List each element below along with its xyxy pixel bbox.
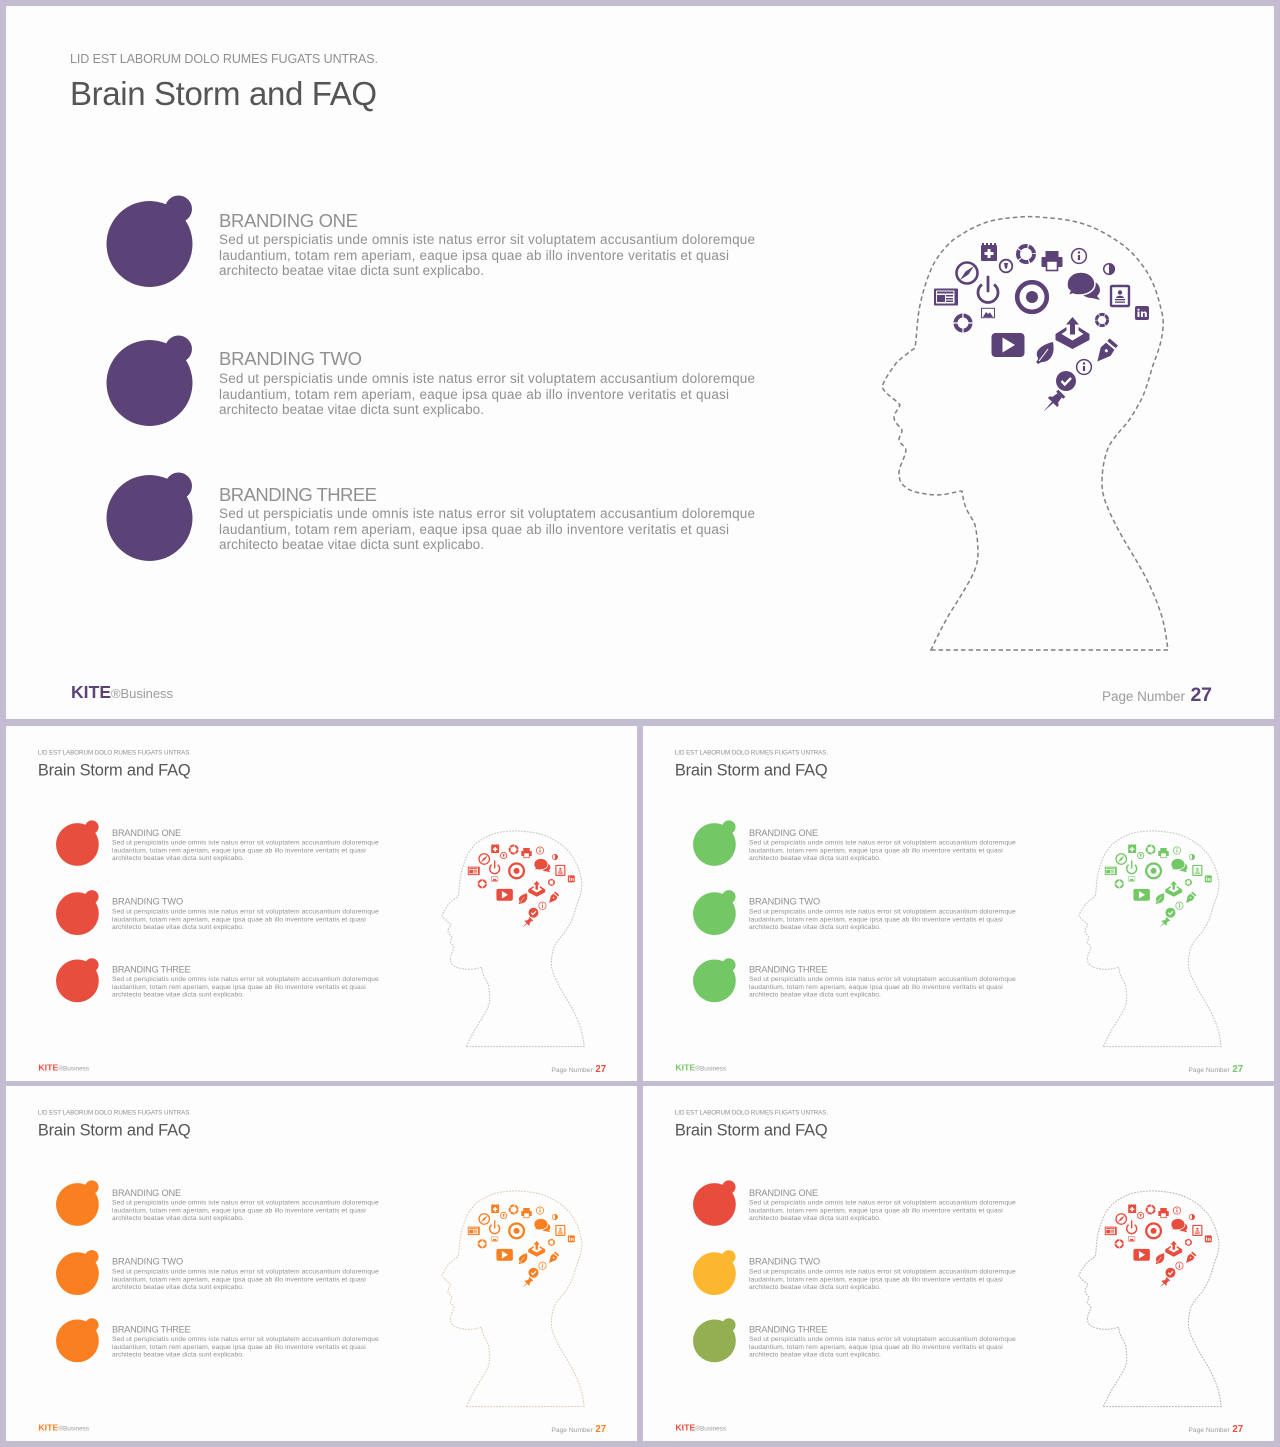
body text: Sed ut perspiciatis unde omnis iste natus error sit voluptatem accusantium doloremque: [219, 371, 755, 386]
heading: BRANDING THREE: [749, 1324, 828, 1334]
badge circle: [693, 1250, 736, 1295]
icon: info: [1072, 249, 1086, 263]
body text: laudantium, totam rem aperiam, eaque ipsa quae ab illo inventore veritatis et quasi: [112, 847, 366, 854]
page number: 27: [1232, 1424, 1243, 1435]
body text: [112, 1200, 379, 1222]
body text: architecto beatae vitae dicta sunt explicabo.: [112, 924, 244, 931]
page number: [551, 1424, 606, 1435]
body text: architecto beatae vitae dicta sunt explicabo.: [749, 924, 881, 931]
head outline: [442, 1191, 584, 1407]
heading: BRANDING THREE: [219, 484, 377, 505]
page number: 27: [1232, 1064, 1243, 1075]
body text: [749, 1269, 1016, 1291]
body text: [749, 909, 1016, 931]
list item: branding one: [693, 1180, 1016, 1226]
title: Brain Storm and FAQ: [70, 75, 377, 112]
icon: push pin: [1039, 389, 1066, 416]
heading: BRANDING TWO: [112, 897, 183, 907]
head outline: [882, 217, 1168, 650]
list item: branding three: [106, 472, 755, 561]
body text: laudantium, totam rem aperiam, eaque ipsa quae ab illo inventore veritatis et quasi: [749, 984, 1003, 991]
heading: BRANDING ONE: [749, 1188, 818, 1198]
icon: leaf: [1036, 342, 1054, 364]
panel: orange slide: [6, 1086, 637, 1441]
body text: Sed ut perspiciatis unde omnis iste natus error sit voluptatem accusantium doloremque: [749, 1200, 1016, 1207]
icon: medical calendar: [981, 243, 997, 261]
footer logo: ®Business: [58, 1424, 89, 1432]
body text: architecto beatae vitae dicta sunt explicabo.: [112, 991, 244, 998]
body text: Sed ut perspiciatis unde omnis iste natus error sit voluptatem accusantium doloremque: [112, 909, 379, 916]
kicker: LID EST LABORUM DOLO RUMES FUGATS UNTRAS.: [675, 1109, 828, 1116]
footer logo: KITE: [71, 682, 111, 702]
body text: Sed ut perspiciatis unde omnis iste natus error sit voluptatem accusantium doloremque: [112, 1269, 379, 1276]
page number: 27: [595, 1424, 606, 1435]
badge circle: [56, 1318, 99, 1362]
heading: BRANDING TWO: [219, 348, 362, 369]
body text: [112, 840, 379, 862]
body text: architecto beatae vitae dicta sunt explicabo.: [749, 1284, 881, 1291]
badge circle: [106, 196, 192, 287]
heading: BRANDING THREE: [112, 964, 191, 974]
footer logo: ®Business: [695, 1424, 726, 1432]
head outline: [1079, 1191, 1221, 1407]
icon: power: [978, 277, 998, 302]
page number: Page Number: [551, 1067, 593, 1074]
body text: [749, 976, 1016, 998]
heading: BRANDING ONE: [112, 1188, 181, 1198]
badge circle: [56, 890, 99, 935]
footer logo: ®Business: [58, 1064, 89, 1072]
body text: architecto beatae vitae dicta sunt explicabo.: [749, 1351, 881, 1358]
badge circle: [106, 472, 192, 561]
body text: architecto beatae vitae dicta sunt explicabo.: [219, 537, 484, 552]
list item: branding two: [693, 890, 1016, 935]
footer logo: ®Business: [695, 1064, 726, 1072]
badge circle: [693, 890, 736, 935]
body text: [112, 1269, 379, 1291]
icon cluster: brain icons: [1105, 1204, 1212, 1290]
body text: [749, 840, 1016, 862]
body text: Sed ut perspiciatis unde omnis iste natus error sit voluptatem accusantium doloremque: [749, 1336, 1016, 1343]
footer logo: [38, 1062, 89, 1072]
icon: fountain pen: [1092, 338, 1119, 366]
icon: half circle: [1104, 263, 1115, 275]
body text: [219, 232, 755, 278]
page number: Page Number: [1188, 1067, 1230, 1074]
body text: laudantium, totam rem aperiam, eaque ipsa quae ab illo inventore veritatis et quasi: [112, 917, 366, 924]
list item: branding one: [693, 820, 1016, 866]
heading: BRANDING TWO: [749, 1257, 820, 1267]
body text: architecto beatae vitae dicta sunt explicabo.: [749, 991, 881, 998]
body text: laudantium, totam rem aperiam, eaque ipsa quae ab illo inventore veritatis et quasi: [112, 1344, 366, 1351]
list item: branding three: [56, 958, 379, 1002]
body text: [112, 1336, 379, 1358]
body text: laudantium, totam rem aperiam, eaque ipsa quae ab illo inventore veritatis et quasi: [749, 1207, 1003, 1214]
list item: branding two: [56, 1250, 379, 1295]
kicker: LID EST LABORUM DOLO RUMES FUGATS UNTRAS.: [675, 749, 828, 756]
heading: BRANDING THREE: [749, 964, 828, 974]
icon: compass: [956, 262, 978, 284]
heading: BRANDING ONE: [219, 210, 358, 231]
badge circle: [56, 1180, 99, 1226]
title: Brain Storm and FAQ: [675, 1121, 828, 1139]
icon cluster: brain icons: [1105, 844, 1212, 930]
icon: bulb: [1000, 260, 1012, 272]
badge circle: [56, 820, 99, 866]
icon: info small: [1077, 360, 1091, 374]
heading: BRANDING ONE: [112, 828, 181, 838]
body text: Sed ut perspiciatis unde omnis iste natus error sit voluptatem accusantium doloremque: [219, 232, 755, 247]
page number: [1188, 1424, 1243, 1435]
body text: Sed ut perspiciatis unde omnis iste natus error sit voluptatem accusantium doloremque: [112, 1200, 379, 1207]
body text: laudantium, totam rem aperiam, eaque ipsa quae ab illo inventore veritatis et quasi: [112, 984, 366, 991]
body text: laudantium, totam rem aperiam, eaque ipsa quae ab illo inventore veritatis et quasi: [749, 917, 1003, 924]
badge circle: [693, 1318, 736, 1362]
icon: check badge: [1056, 371, 1076, 391]
icon cluster: brain icons: [468, 844, 575, 930]
body text: [219, 506, 755, 552]
list item: branding three: [693, 1318, 1016, 1362]
icon: target: [1017, 282, 1047, 312]
kicker: LID EST LABORUM DOLO RUMES FUGATS UNTRAS.: [70, 52, 378, 66]
list item: branding two: [106, 336, 755, 426]
footer logo: [71, 682, 174, 702]
page number: Page Number: [1102, 689, 1186, 704]
footer logo: KITE: [38, 1422, 58, 1432]
badge circle: [56, 958, 99, 1002]
body text: laudantium, totam rem aperiam, eaque ipsa quae ab illo inventore veritatis et quasi: [219, 387, 729, 402]
icon: aperture: [1018, 246, 1034, 262]
footer logo: KITE: [675, 1422, 695, 1432]
body text: laudantium, totam rem aperiam, eaque ipsa quae ab illo inventore veritatis et quasi: [112, 1277, 366, 1284]
body text: Sed ut perspiciatis unde omnis iste natus error sit voluptatem accusantium doloremque: [112, 976, 379, 983]
list item: branding one: [106, 196, 755, 287]
heading: BRANDING ONE: [749, 828, 818, 838]
body text: architecto beatae vitae dicta sunt explicabo.: [112, 1284, 244, 1291]
body text: Sed ut perspiciatis unde omnis iste natus error sit voluptatem accusantium doloremque: [112, 1336, 379, 1343]
page number: 27: [1190, 684, 1212, 706]
icon: aperture ring: [1096, 314, 1108, 326]
list item: branding two: [693, 1250, 1016, 1295]
heading: BRANDING TWO: [749, 897, 820, 907]
list item: branding three: [693, 958, 1016, 1002]
list item: branding one: [56, 820, 379, 866]
heading: BRANDING TWO: [112, 1257, 183, 1267]
body text: architecto beatae vitae dicta sunt explicabo.: [112, 855, 244, 862]
badge circle: [693, 958, 736, 1002]
body text: laudantium, totam rem aperiam, eaque ipsa quae ab illo inventore veritatis et quasi: [749, 1277, 1003, 1284]
footer logo: KITE: [38, 1062, 58, 1072]
body text: laudantium, totam rem aperiam, eaque ipsa quae ab illo inventore veritatis et quasi: [219, 248, 729, 263]
footer logo: [675, 1422, 726, 1432]
body text: architecto beatae vitae dicta sunt explicabo.: [749, 1215, 881, 1222]
badge circle: [106, 336, 192, 426]
icon: printer: [1042, 251, 1062, 270]
heading: BRANDING THREE: [112, 1324, 191, 1334]
body text: Sed ut perspiciatis unde omnis iste natus error sit voluptatem accusantium doloremque: [749, 1269, 1016, 1276]
icon cluster: brain icons: [468, 1204, 575, 1290]
panel: green slide: [643, 726, 1274, 1081]
title: Brain Storm and FAQ: [675, 761, 828, 779]
kicker: LID EST LABORUM DOLO RUMES FUGATS UNTRAS.: [38, 749, 191, 756]
title: Brain Storm and FAQ: [38, 1121, 191, 1139]
body text: laudantium, totam rem aperiam, eaque ipsa quae ab illo inventore veritatis et quasi: [749, 1344, 1003, 1351]
body text: [219, 371, 755, 417]
head outline: [1079, 831, 1221, 1047]
body text: architecto beatae vitae dicta sunt explicabo.: [112, 1215, 244, 1222]
icon: newspaper: [934, 288, 958, 306]
title: Brain Storm and FAQ: [38, 761, 191, 779]
page number: Page Number: [551, 1427, 593, 1434]
footer logo: ®Business: [111, 686, 174, 701]
page number: [1188, 1064, 1243, 1075]
kicker: LID EST LABORUM DOLO RUMES FUGATS UNTRAS.: [38, 1109, 191, 1116]
page number: 27: [595, 1064, 606, 1075]
body text: [749, 1200, 1016, 1222]
body text: Sed ut perspiciatis unde omnis iste natus error sit voluptatem accusantium doloremque: [112, 840, 379, 847]
footer logo: [38, 1422, 89, 1432]
body text: Sed ut perspiciatis unde omnis iste natus error sit voluptatem accusantium doloremque: [749, 909, 1016, 916]
badge circle: [56, 1250, 99, 1295]
body text: architecto beatae vitae dicta sunt explicabo.: [112, 1351, 244, 1358]
badge circle: [693, 820, 736, 866]
list item: branding one: [56, 1180, 379, 1226]
panel: main purple slide: [6, 6, 1274, 719]
page number: [1102, 684, 1212, 706]
body text: architecto beatae vitae dicta sunt explicabo.: [219, 402, 484, 417]
icon: image: [982, 308, 994, 318]
panel: multicolour slide: [643, 1086, 1274, 1441]
list item: branding two: [56, 890, 379, 935]
page number: [551, 1064, 606, 1075]
icon: contact card: [1111, 286, 1129, 306]
page number: Page Number: [1188, 1427, 1230, 1434]
icon: play button: [992, 333, 1024, 357]
body text: Sed ut perspiciatis unde omnis iste natus error sit voluptatem accusantium doloremque: [749, 840, 1016, 847]
body text: laudantium, totam rem aperiam, eaque ipsa quae ab illo inventore veritatis et quasi: [112, 1207, 366, 1214]
list item: branding three: [56, 1318, 379, 1362]
body text: laudantium, totam rem aperiam, eaque ipsa quae ab illo inventore veritatis et quasi: [219, 522, 729, 537]
body text: Sed ut perspiciatis unde omnis iste natus error sit voluptatem accusantium doloremque: [219, 506, 755, 521]
panel: red slide: [6, 726, 637, 1081]
icon cluster: brain icons: [934, 243, 1149, 416]
badge circle: [693, 1180, 736, 1226]
body text: Sed ut perspiciatis unde omnis iste natus error sit voluptatem accusantium doloremque: [749, 976, 1016, 983]
body text: [112, 909, 379, 931]
icon: linkedin: [1135, 306, 1149, 320]
body text: architecto beatae vitae dicta sunt explicabo.: [219, 263, 484, 278]
body text: architecto beatae vitae dicta sunt explicabo.: [749, 855, 881, 862]
head outline: [442, 831, 584, 1047]
body text: laudantium, totam rem aperiam, eaque ipsa quae ab illo inventore veritatis et quasi: [749, 847, 1003, 854]
icon: upload box: [1056, 317, 1090, 349]
body text: [112, 976, 379, 998]
footer logo: [675, 1062, 726, 1072]
footer logo: KITE: [675, 1062, 695, 1072]
icon: chat bubbles: [1067, 272, 1100, 300]
body text: [749, 1336, 1016, 1358]
icon: lifebuoy: [953, 313, 973, 333]
